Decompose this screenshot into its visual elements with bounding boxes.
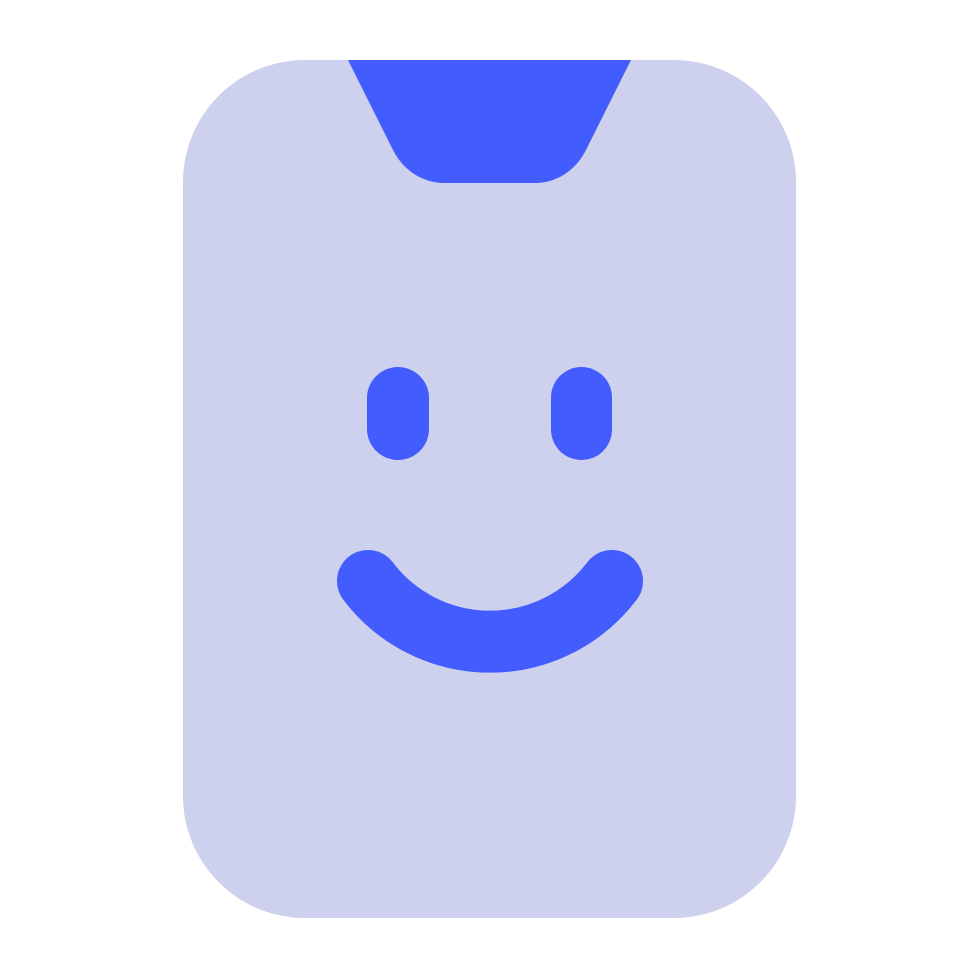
left eye (367, 367, 429, 460)
smile (368, 581, 612, 642)
phone body (183, 60, 796, 918)
phone notch (348, 60, 631, 183)
right eye (551, 367, 612, 460)
